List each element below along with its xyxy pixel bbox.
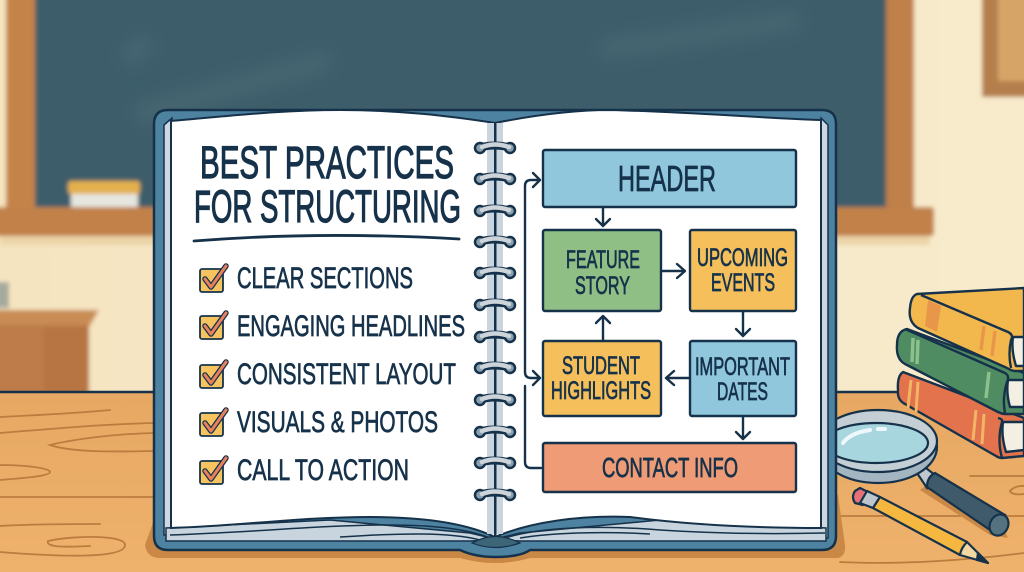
notebook cover [154, 110, 836, 557]
box: contact info: CONTACT INFO [602, 452, 738, 483]
spine [472, 536, 520, 548]
green book [897, 329, 1024, 414]
classroom background [0, 0, 1024, 395]
checklist item: call to action [200, 454, 409, 487]
arrow: loop to student highlights [525, 371, 540, 385]
box: contact info [543, 443, 796, 492]
arrow: important dates to student highlights [666, 371, 689, 385]
box: feature story: FEATURE [566, 246, 640, 274]
box: header [543, 150, 796, 207]
box: upcoming events: UPCOMING [697, 244, 788, 272]
checklist item: clear sections [200, 262, 413, 295]
pencil [853, 488, 988, 563]
arrow: upcoming events to important dates [736, 312, 750, 336]
desk [0, 392, 1024, 572]
arrow: contact info loop [525, 386, 541, 468]
box: student highlights: HIGHLIGHTS [551, 377, 651, 405]
book stack [897, 288, 1024, 458]
cabinet [0, 282, 99, 395]
checklist item: clear sections: CLEAR SECTIONS [237, 262, 413, 295]
arrow: header to feature story [596, 207, 610, 226]
arrows [525, 173, 750, 468]
wall picture frame [982, 0, 1024, 97]
arrow: feature story to upcoming events [662, 264, 685, 278]
magnifying glass [819, 410, 1012, 539]
checklist item: call to action: CALL TO ACTION [237, 454, 409, 487]
notebook [154, 110, 836, 557]
box: header: HEADER [618, 158, 716, 199]
title: BEST PRACTICES [200, 137, 454, 188]
magnifier handle [915, 465, 1012, 539]
box: feature story [543, 230, 661, 311]
chalk smudges [125, 20, 800, 115]
title underline [194, 235, 459, 241]
flowchart [525, 150, 796, 492]
magnifier lens [819, 410, 937, 483]
spine gutter [487, 122, 503, 536]
arrow: loop up to header [525, 173, 540, 372]
checklist item: consistent layout: CONSISTENT LAYOUT [237, 358, 456, 391]
arrow: student highlights to feature story [596, 316, 610, 340]
spiral binding [475, 143, 515, 500]
checklist item: engaging headlines: ENGAGING HEADLINES [237, 310, 465, 343]
left page [171, 110, 495, 537]
checklist item: consistent layout [200, 358, 456, 391]
title [194, 137, 461, 232]
box: student highlights [543, 341, 661, 416]
eraser on tray [68, 181, 140, 207]
box: upcoming events [690, 230, 796, 311]
box: student highlights: STUDENT [562, 352, 640, 380]
checklist item: engaging headlines [200, 310, 465, 343]
box: important dates: DATES [717, 378, 768, 406]
wood grain [0, 410, 1024, 563]
box: important dates: IMPORTANT [695, 353, 790, 381]
right page [495, 110, 821, 537]
box: upcoming events: EVENTS [711, 269, 775, 297]
page edges [164, 118, 172, 535]
title: FOR STRUCTURING [194, 181, 461, 232]
arrow: important dates to contact info [736, 417, 750, 439]
blackboard [0, 0, 934, 245]
checklist item: visuals and photos [200, 406, 438, 439]
box: feature story: STORY [575, 272, 630, 300]
checklist [200, 262, 465, 487]
checklist item: visuals and photos: VISUALS & PHOTOS [237, 406, 438, 439]
yellow book [910, 288, 1024, 371]
red book [898, 372, 1024, 458]
notebook shadow [145, 495, 845, 563]
box: important dates [690, 341, 796, 416]
